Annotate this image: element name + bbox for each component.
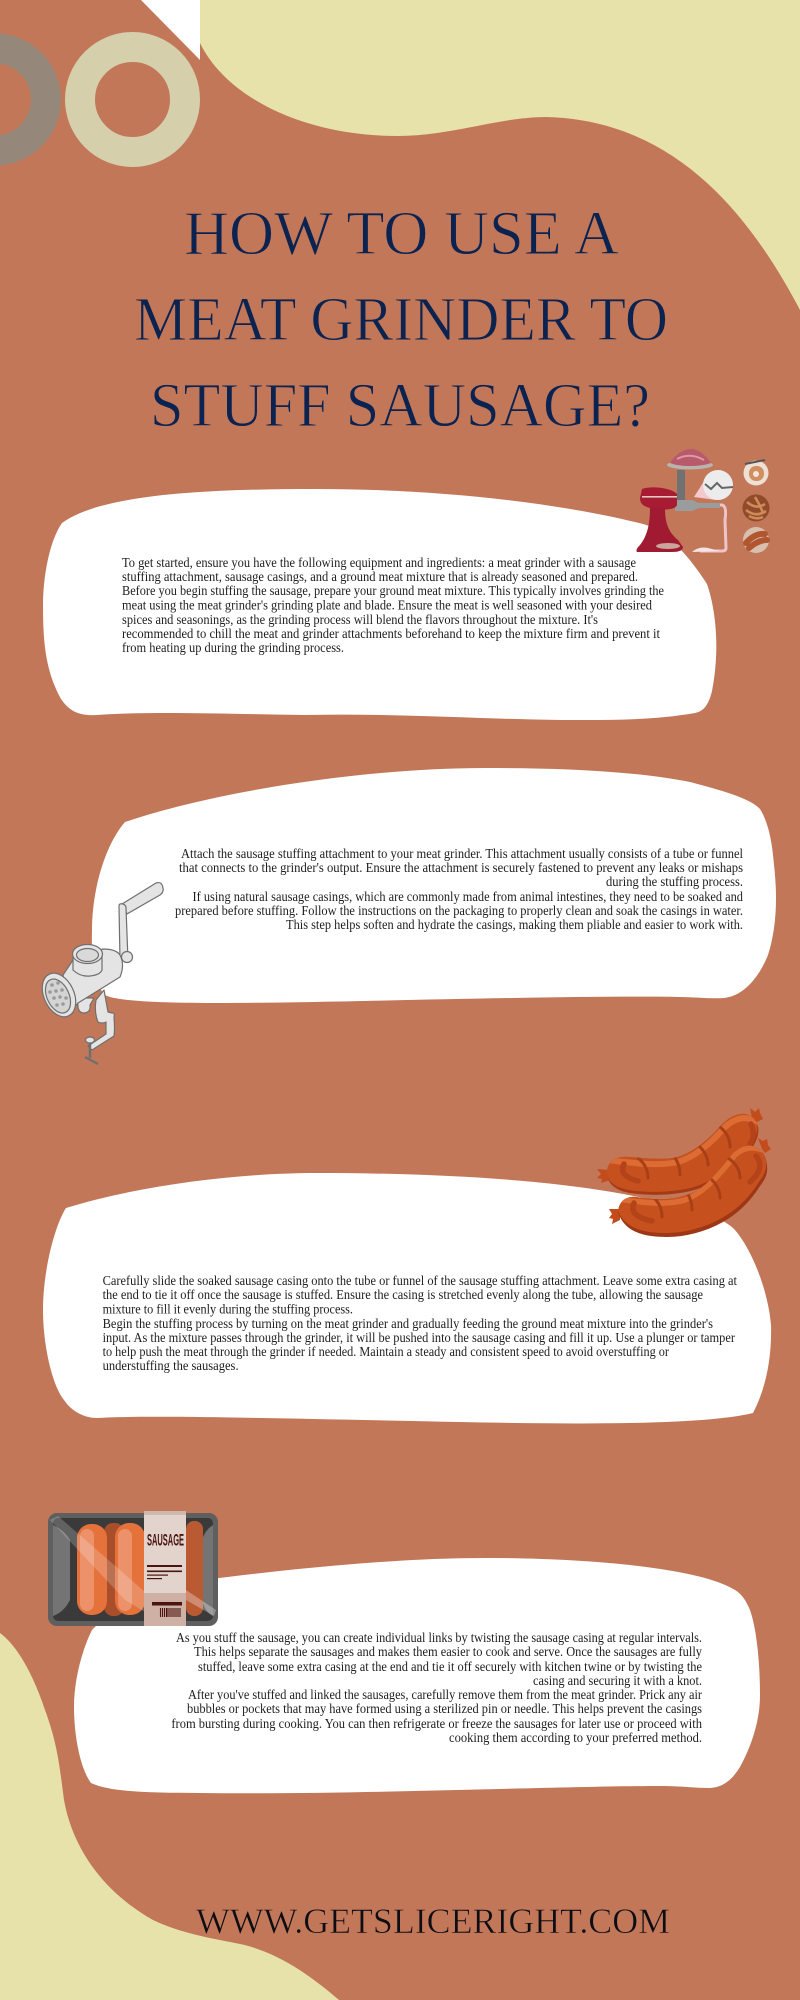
text block: step 1: To get started, ensure you have the following equipment and ingredients: a meat grinder with a sausage (122, 555, 636, 570)
text block: step 3: mixture to fill it evenly during the stuffing process. (103, 1302, 353, 1316)
text block: step 2: This step helps soften and hydrate the casings, making them pliable and easier to work with. (286, 917, 743, 932)
text block: step 2: that connects to the grinder's output. Ensure the attachment is securely fastened to prevent any leaks or mishaps (179, 860, 743, 875)
title: MEAT GRINDER TO (134, 286, 668, 354)
title: STUFF SAUSAGE? (150, 372, 650, 440)
grey ring (0, 48, 46, 150)
text block: step 1 (122, 555, 664, 655)
text block: step 4: cooking them according to your preferred method. (449, 1730, 702, 1745)
icon: packaged sausages tray: SAUSAGE (147, 1530, 184, 1550)
text block: step 1: stuffing attachment, sausage casings, and a ground meat mixture that is already seasoned and prepared. (122, 569, 638, 584)
text block: step 1: Before you begin stuffing the sausage, prepare your ground meat mixture. This typically involves grinding the (122, 583, 664, 598)
icon: two grilled sausages (597, 1108, 771, 1237)
text block: step 4: stuffed, leave some extra casing at the end and tie it off securely with kitchen twine or by twisting the (198, 1659, 702, 1674)
icon: stand mixer with meat grinder attachment (636, 449, 770, 553)
text block: step 4: After you've stuffed and linked the sausages, carefully remove them from the meat grinder. Prick any air (188, 1687, 702, 1702)
text block: step 3: Begin the stuffing process by turning on the meat grinder and gradually feeding the ground meat mixture into the grinder's (103, 1316, 713, 1331)
text block: step 4 (171, 1630, 702, 1745)
panel: step 3 background (43, 1173, 771, 1423)
text block: step 3: understuffing the sausages. (103, 1358, 239, 1373)
barcode (160, 1608, 180, 1617)
label band (144, 1511, 186, 1626)
text block: step 1: spices and seasonings, as the grinding process will blend the flavors throughout the mixture. It's (122, 612, 598, 627)
text block: step 2: If using natural sausage casings, which are commonly made from animal intestines, they need to be soaked and (192, 889, 743, 904)
icon: packaged sausages tray (48, 1511, 218, 1626)
white corner triangle (141, 0, 200, 60)
text block: step 3: to help push the meat through the grinder if needed. Maintain a steady and consistent speed to avoid overstuffing or (103, 1344, 669, 1359)
text block: step 3 (103, 1273, 737, 1373)
text block: step 1: from heating up during the grinding process. (122, 640, 344, 655)
text block: step 3: Carefully slide the soaked sausage casing onto the tube or funnel of the sausage stuffing attachment. Leave some extra casing at (103, 1273, 737, 1288)
title: HOW TO USE A (184, 200, 619, 268)
text block: step 4: bubbles or pockets that may have formed using a sterilized pin or needle. This helps prevent the casings (187, 1701, 702, 1716)
text block: step 3: input. As the mixture passes through the grinder, it will be pushed into the sausage casing and fill it up. Use a plunger or tamper (103, 1330, 735, 1345)
text block: step 2: Attach the sausage stuffing attachment to your meat grinder. This attachment usually consists of a tube or funnel (181, 846, 743, 861)
pale ring (80, 47, 185, 152)
footer website: WWW.GETSLICERIGHT.COM (196, 1901, 670, 1941)
panel: step 1 background (43, 489, 716, 720)
text block: step 4: This helps separate the sausages and makes them easier to cook and serve. Once the sausages are fully (194, 1644, 702, 1659)
text block: step 4: casing and securing it with a knot. (533, 1673, 702, 1688)
text block: step 2: during the stuffing process. (606, 874, 743, 889)
panel: step 2 background (92, 768, 776, 1003)
panel: step 4 background (74, 1558, 760, 1793)
text block: step 4: from bursting during cooking. You can then refrigerate or freeze the sausages for later use or proceed with (171, 1716, 702, 1731)
text block: step 3: the end to tie it off once the sausage is stuffed. Ensure the casing is stretched evenly along the tube, allowing the sausage (103, 1287, 703, 1302)
cream blob: top right (200, 0, 800, 310)
text block: step 4: As you stuff the sausage, you can create individual links by twisting the sausage casing at regular intervals. (176, 1630, 702, 1645)
text block: step 2 (175, 846, 743, 932)
text block: step 1: recommended to chill the meat and grinder attachments beforehand to keep the mixture firm and prevent it (122, 626, 660, 641)
icon: hand-crank meat grinder (36, 883, 163, 1064)
title (134, 200, 668, 440)
text block: step 1: meat using the meat grinder's grinding plate and blade. Ensure the meat is well seasoned with your desired (122, 598, 652, 612)
text block: step 2: prepared before stuffing. Follow the instructions on the packaging to properly clean and soak the casings in water. (175, 903, 743, 918)
cream blob: bottom left (0, 1633, 339, 2000)
